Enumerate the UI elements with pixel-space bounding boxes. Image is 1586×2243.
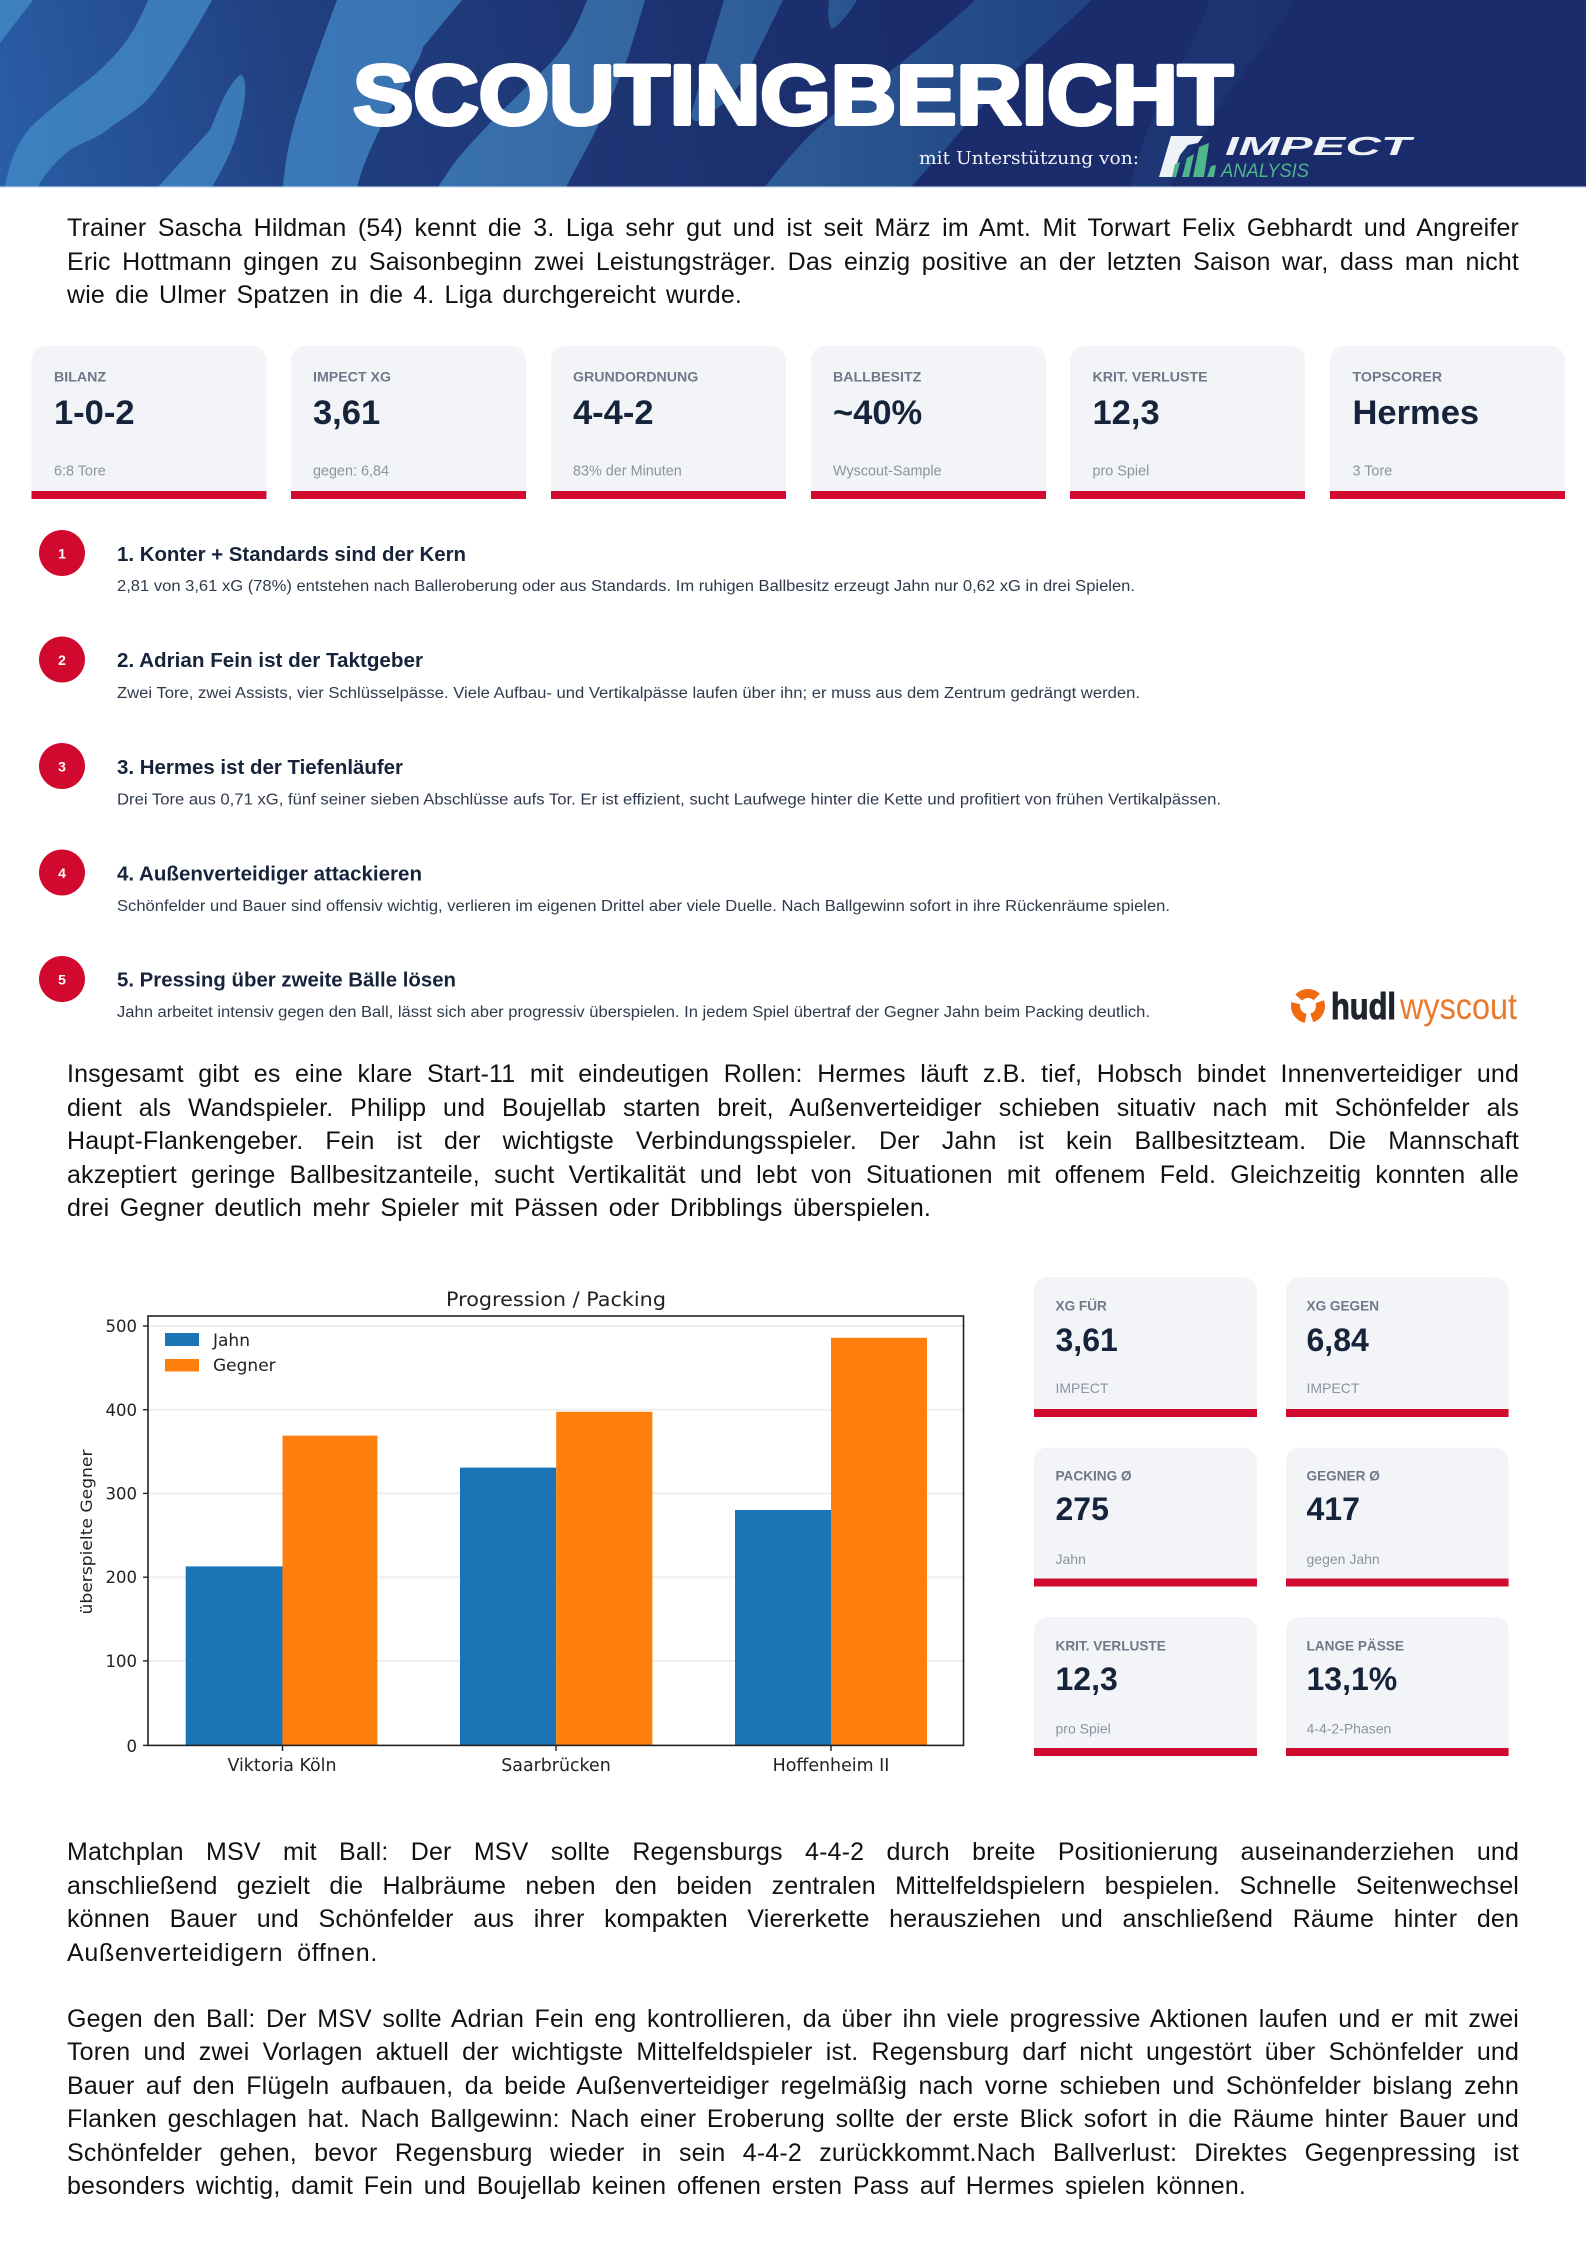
match plan against ball text block — [67, 2005, 1519, 2200]
KPI card: Bilanz: 1-0-2 — [54, 394, 135, 432]
stat card: xG gegen — [1286, 1277, 1509, 1417]
KPI card: Grundordnung: 4-4-2 — [573, 394, 654, 432]
stat card: Krit. Verluste: pro Spiel — [1056, 1720, 1111, 1736]
match plan with ball text block: Außenverteidigern öffnen. — [67, 1938, 378, 1966]
match plan with ball text block: können Bauer und Schönfelder aus ihrer kompakten Viererkette herausziehen und anschließend Räume hinter den — [67, 1905, 1519, 1933]
KPI card: Krit. Verluste: 12,3 — [1092, 394, 1160, 432]
finding 4: Schönfelder und Bauer sind offensiv wichtig, verlieren im eigenen Drittel aber viele Duelle. Nach Ballgewinn sofort in ihre Rückenräume spielen. — [117, 898, 1170, 915]
y axis title: überspielte Gegner — [77, 1449, 96, 1614]
match plan against ball text block: Flanken geschlagen hat. Nach Ballgewinn: Nach einer Eroberung sollte der erste Blick sofort in die Räume hinter Bauer und — [67, 2105, 1519, 2133]
legend: Jahn — [212, 1331, 250, 1351]
finding 5 — [39, 956, 1150, 1021]
y axis tick labels: 100 — [106, 1652, 137, 1671]
KPI card: Topscorer: TOPSCORER — [1352, 370, 1442, 386]
finding 1 — [39, 530, 1135, 595]
logo: Impect Analysis — [1159, 131, 1415, 182]
stat card: Packing: PACKING Ø — [1056, 1468, 1132, 1484]
x axis labels: Saarbrücken — [501, 1756, 611, 1776]
stat card: xG für: XG FÜR — [1056, 1298, 1107, 1314]
finding 5: Jahn arbeitet intensiv gegen den Ball, lässt sich aber progressiv überspielen. In jedem Spiel übertraf der Gegner Jahn beim Packing deutlich. — [117, 1004, 1150, 1021]
KPI card: Bilanz: 6:8 Tore — [54, 464, 106, 480]
stat card: Lange Pässe: LANGE PÄSSE — [1306, 1638, 1404, 1654]
KPI card: Krit. Verluste: KRIT. VERLUSTE — [1092, 370, 1208, 386]
logo: hudl wyscout — [1292, 986, 1518, 1027]
logo: Impect Analysis: IMPECT — [1225, 131, 1415, 161]
intro text block — [67, 214, 1519, 309]
stat card: xG für — [1034, 1277, 1257, 1417]
match plan with ball text block: Matchplan MSV mit Ball: Der MSV sollte Regensburgs 4-4-2 durch breite Positionierung auseinanderziehen und — [67, 1838, 1519, 1866]
squad analysis text block: akzeptiert geringe Ballbesitzanteile, sucht Vertikalität und lebt von Situationen mit offenem Feld. Gleichzeitig konnten alle — [67, 1160, 1519, 1188]
KPI card: Grundordnung — [551, 346, 786, 499]
KPI card: Impect xG: IMPECT XG — [313, 370, 391, 386]
stat card: xG gegen: XG GEGEN — [1306, 1298, 1379, 1314]
finding 3 — [39, 743, 1221, 808]
finding 1: 1. Konter + Standards sind der Kern — [117, 544, 466, 566]
legend — [165, 1331, 276, 1376]
match plan against ball text block: besonders wichtig, damit Fein und Boujellab keinen offenen ersten Pass auf Hermes spielen können. — [67, 2172, 1246, 2200]
legend: Gegner — [213, 1356, 276, 1376]
KPI card: Grundordnung: GRUNDORDNUNG — [573, 370, 698, 386]
x axis labels — [227, 1756, 889, 1776]
bars: Gegner — [282, 1338, 927, 1745]
KPI card: Topscorer: 3 Tore — [1352, 464, 1392, 480]
stat card: Lange Pässe — [1286, 1617, 1509, 1756]
stat card: Lange Pässe: 13,1% — [1306, 1661, 1397, 1697]
squad analysis text block: dient als Wandspieler. Philipp und Boujellab starten breit, Außenverteidiger schieben situativ nach mit Schönfelder als — [67, 1094, 1519, 1122]
stat card: Gegner: 417 — [1306, 1491, 1360, 1527]
intro text block: Eric Hottmann gingen zu Saisonbeginn zwei Leistungsträger. Das einzig positive an der letzten Saison war, dass man nicht — [67, 248, 1519, 276]
finding 3: Drei Tore aus 0,71 xG, fünf seiner sieben Abschlüsse aufs Tor. Er ist effizient, sucht Laufwege hinter die Kette und profitiert von frühen Vertikalpässen. — [117, 792, 1221, 808]
stat card: Gegner: gegen Jahn — [1306, 1551, 1380, 1567]
match plan with ball text block: anschließend gezielt die Halbräume neben den beiden zentralen Mittelfeldspielern bespielen. Schnelle Seitenwechsel — [67, 1872, 1519, 1900]
KPI card: Krit. Verluste — [1070, 346, 1305, 499]
stat card: Krit. Verluste: KRIT. VERLUSTE — [1056, 1638, 1166, 1654]
bars: Jahn — [186, 1468, 831, 1745]
stat card: Lange Pässe: 4-4-2-Phasen — [1306, 1720, 1391, 1736]
KPI card: Ballbesitz: BALLBESITZ — [833, 370, 922, 386]
stat card: xG für: 3,61 — [1056, 1322, 1118, 1358]
title: SCOUTINGBERICHT — [353, 48, 1233, 142]
match plan with ball text block — [67, 1838, 1519, 1966]
finding 3: 3 — [58, 758, 66, 774]
finding 4 — [39, 850, 1170, 915]
KPI card: Ballbesitz — [811, 346, 1046, 499]
finding 1: 2,81 von 3,61 xG (78%) entstehen nach Balleroberung oder aus Standards. Im ruhigen Ballbesitz erzeugt Jahn nur 0,62 xG in drei Spielen. — [117, 578, 1135, 595]
squad analysis text block: Haupt-Flankengeber. Fein ist der wichtigste Verbindungsspieler. Der Jahn ist kein Ballbesitzteam. Die Mannschaft — [67, 1127, 1519, 1155]
finding 3: 3. Hermes ist der Tiefenläufer — [117, 757, 403, 779]
y axis tick labels: 300 — [106, 1484, 137, 1504]
finding 5: 5 — [58, 972, 66, 988]
KPI card: Ballbesitz: Wyscout-Sample — [833, 464, 942, 480]
x axis labels: Viktoria Köln — [227, 1756, 337, 1776]
finding 1: 1 — [58, 546, 66, 562]
match plan against ball text block: Bauer auf den Flügeln aufbauen, da beide Außenverteidiger regelmäßig nach vorne schieben und Schönfelder bislang zehn — [67, 2072, 1519, 2100]
logo: Impect Analysis: ANALYSIS — [1220, 161, 1309, 182]
stat card: Packing: Jahn — [1056, 1551, 1086, 1567]
KPI card: Topscorer — [1330, 346, 1565, 499]
KPI card: Impect xG: 3,61 — [313, 394, 380, 432]
stat card: xG für: IMPECT — [1056, 1380, 1109, 1396]
logo: hudl wyscout: wyscout — [1399, 986, 1518, 1027]
match plan against ball text block: Schönfelder gehen, bevor Regensburg wieder in sein 4-4-2 zurückkommt.Nach Ballverlust: Direktes Gegenpressing ist — [67, 2139, 1519, 2167]
y axis tick labels: 200 — [106, 1568, 137, 1587]
stat card: Krit. Verluste — [1034, 1617, 1257, 1756]
finding 5: 5. Pressing über zweite Bälle lösen — [117, 970, 456, 992]
y axis tick labels — [106, 1317, 137, 1756]
header banner — [0, 0, 1586, 188]
finding 2: Zwei Tore, zwei Assists, vier Schlüsselpässe. Viele Aufbau- und Vertikalpässe laufen über ihn; er muss aus dem Zentrum gedrängt werden. — [117, 685, 1140, 702]
match plan against ball text block: Toren und zwei Vorlagen aktuell der wichtigste Mittelfeldspieler ist. Regensburg darf nicht ungestört über Schönfelder und — [67, 2038, 1519, 2066]
logo: hudl wyscout: hudl — [1331, 986, 1396, 1027]
finding 4: 4. Außenverteidiger attackieren — [117, 864, 422, 886]
stat card: Packing: 275 — [1056, 1491, 1109, 1527]
KPI card: Bilanz — [32, 346, 266, 499]
bar chart: Progression / Packing — [77, 1288, 964, 1776]
finding 2: 2. Adrian Fein ist der Taktgeber — [117, 650, 423, 672]
sponsor caption: mit Unterstützung von: — [919, 148, 1139, 169]
KPI card: Krit. Verluste: pro Spiel — [1092, 464, 1149, 480]
stat card: Gegner — [1286, 1448, 1509, 1586]
intro text block: wie die Ulmer Spatzen in die 4. Liga durchgereicht wurde. — [67, 281, 742, 309]
KPI card: Ballbesitz: ~40% — [833, 394, 922, 432]
KPI card: Grundordnung: 83% der Minuten — [573, 464, 682, 480]
y axis tick labels: 400 — [106, 1401, 137, 1420]
finding 2 — [39, 636, 1140, 702]
stat card: Packing — [1034, 1448, 1257, 1586]
stat card: xG gegen: 6,84 — [1306, 1322, 1369, 1358]
y axis tick labels: 0 — [126, 1737, 137, 1756]
stat card: xG gegen: IMPECT — [1306, 1380, 1360, 1396]
finding 2: 2 — [58, 652, 66, 668]
intro text block: Trainer Sascha Hildman (54) kennt die 3. Liga sehr gut und ist seit März im Amt. Mit Torwart Felix Gebhardt und Angreifer — [67, 214, 1519, 242]
squad analysis text block: drei Gegner deutlich mehr Spieler mit Pässen oder Dribblings überspielen. — [67, 1194, 931, 1222]
KPI card: Impect xG: gegen: 6,84 — [313, 464, 389, 480]
stat card: Gegner: GEGNER Ø — [1306, 1468, 1380, 1484]
stat card: Krit. Verluste: 12,3 — [1056, 1661, 1118, 1697]
y axis tick labels: 500 — [106, 1317, 137, 1336]
KPI card: Impect xG — [291, 346, 526, 499]
finding 4: 4 — [58, 865, 66, 881]
KPI card: Bilanz: BILANZ — [54, 370, 106, 386]
squad analysis text block — [67, 1060, 1519, 1222]
KPI card: Topscorer: Hermes — [1352, 394, 1479, 432]
match plan against ball text block: Gegen den Ball: Der MSV sollte Adrian Fein eng kontrollieren, da über ihn viele progressive Aktionen laufen und er mit zwei — [67, 2005, 1519, 2033]
x axis labels: Hoffenheim II — [773, 1756, 889, 1776]
chart title: Progression / Packing — [446, 1288, 666, 1311]
squad analysis text block: Insgesamt gibt es eine klare Start-11 mit eindeutigen Rollen: Hermes läuft z.B. tief, Hobsch bindet Innenverteidiger und — [67, 1060, 1519, 1088]
